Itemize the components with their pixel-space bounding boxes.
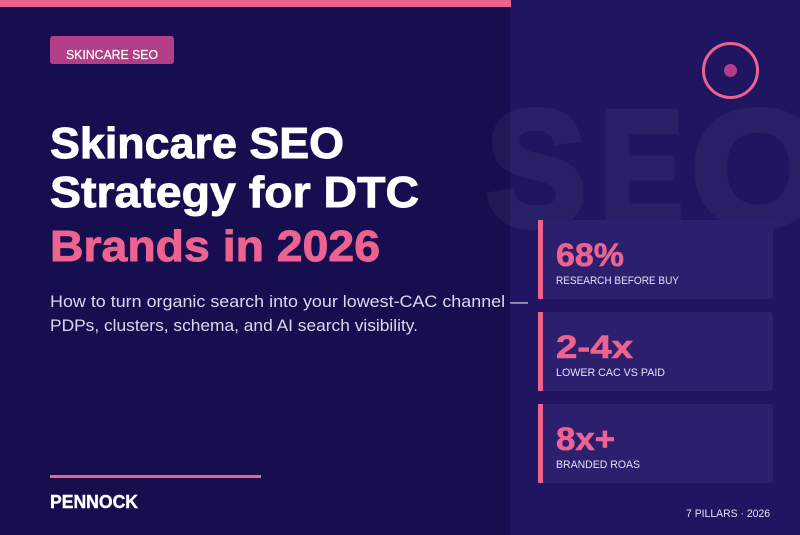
stat card: 68%	[538, 220, 773, 299]
stat card: 8x+	[538, 404, 773, 483]
watermark: SEO	[486, 77, 800, 260]
title: Brands in 2026	[50, 222, 380, 271]
stat card: 68%: 68%	[556, 237, 624, 273]
footer rule	[50, 475, 261, 478]
badge: skincare seo	[50, 36, 174, 64]
watermark: SEO: E	[600, 77, 683, 260]
stat card: 2-4x: LOWER CAC VS PAID	[556, 367, 665, 379]
subtitle: How to turn organic search into your lowest-CAC channel —	[50, 293, 529, 311]
stat card: 8x+: BRANDED ROAS	[556, 459, 640, 471]
top accent bar	[0, 0, 511, 7]
stat card: 68%: RESEARCH BEFORE BUY	[556, 275, 680, 287]
stat card: 2-4x: 2-4x	[556, 329, 633, 365]
footer note: 7 PILLARS · 2026	[686, 508, 770, 520]
watermark: SEO: S	[486, 77, 586, 260]
brand: pennock: PENNOCK	[50, 492, 138, 512]
stat card: 2-4x	[538, 312, 773, 391]
title: Strategy for DTC	[50, 168, 419, 217]
stat card: 8x+: 8x+	[556, 421, 615, 457]
badge: skincare seo: SKINCARE SEO	[66, 47, 158, 62]
icon: target circle	[704, 44, 758, 98]
subtitle: PDPs, clusters, schema, and AI search visibility.	[50, 317, 418, 335]
title	[50, 119, 419, 271]
title: Skincare SEO	[50, 119, 344, 168]
subtitle	[50, 293, 529, 335]
right panel	[510, 0, 800, 535]
